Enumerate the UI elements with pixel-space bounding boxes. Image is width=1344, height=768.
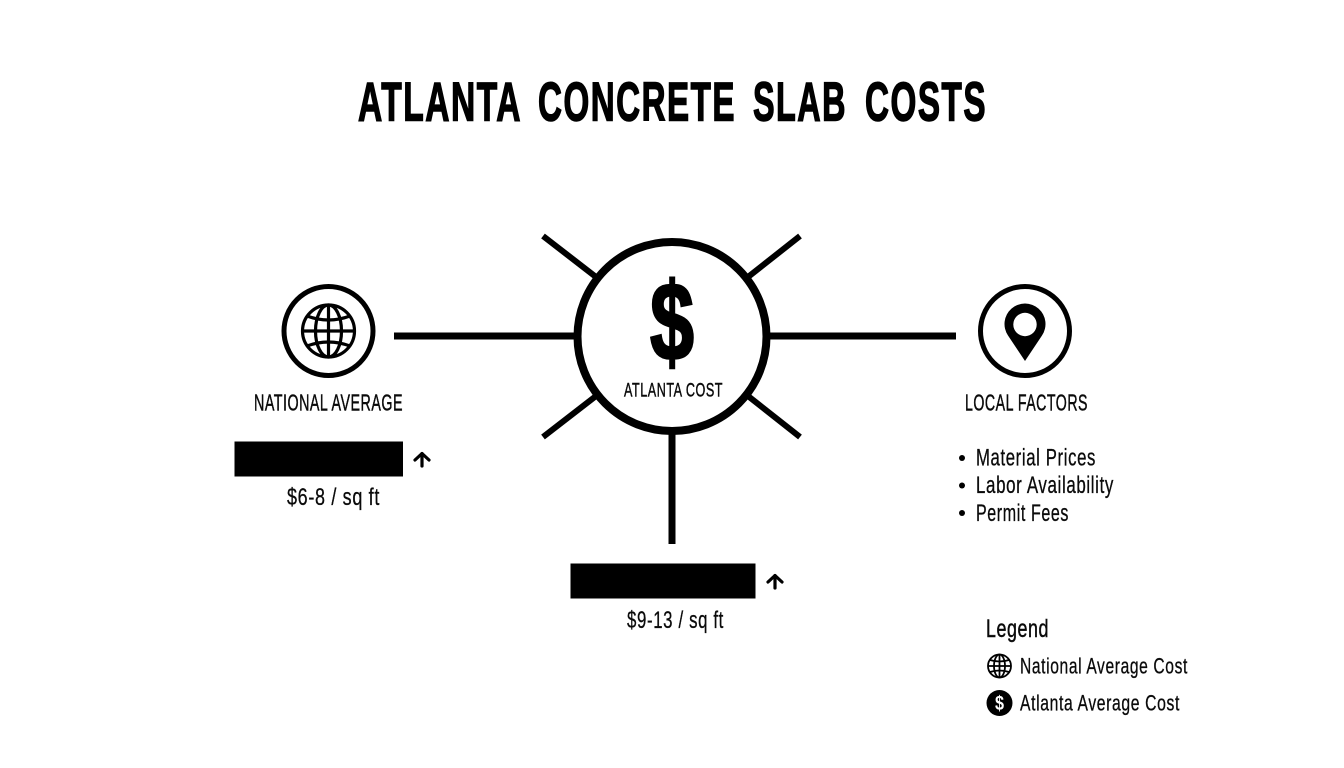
icon: legend dollar: $ <box>995 693 1004 715</box>
connector lines <box>394 236 956 544</box>
panel: local factors <box>959 286 1114 527</box>
icon: dollar sign: $ <box>650 261 694 384</box>
icon: location pin <box>980 286 1070 376</box>
heading: national average: NATIONAL AVERAGE <box>254 390 403 416</box>
legend title: Legend <box>986 615 1049 643</box>
arrow: national up <box>415 454 429 466</box>
title: CONCRETE <box>538 70 736 132</box>
icon: globe <box>284 286 373 376</box>
title <box>358 70 987 132</box>
title: COSTS <box>865 70 987 132</box>
central hub: Atlanta cost <box>578 242 766 431</box>
panel: Atlanta cost bar <box>570 564 782 634</box>
bar: Atlanta cost <box>570 564 756 598</box>
bar: national cost <box>234 442 403 476</box>
legend label: national: National Average Cost <box>1020 654 1188 678</box>
list: local factors: Labor Availability <box>976 472 1114 499</box>
list: local factors <box>959 444 1114 527</box>
legend label: Atlanta: Atlanta Average Cost <box>1020 690 1180 716</box>
value: national cost: $6-8 / sq ft <box>287 484 380 511</box>
hub label: ATLANTA COST <box>624 380 723 402</box>
icon: legend globe <box>988 654 1011 678</box>
list: local factors: Material Prices <box>976 444 1096 472</box>
value: Atlanta cost: $9-13 / sq ft <box>627 607 724 634</box>
title: SLAB <box>753 70 847 132</box>
arrow: Atlanta up <box>768 576 782 588</box>
panel: national average <box>234 286 429 511</box>
heading: local factors: LOCAL FACTORS <box>965 390 1088 416</box>
list: local factors: Permit Fees <box>976 500 1069 527</box>
title: ATLANTA <box>358 70 522 132</box>
icon: legend dollar <box>986 690 1012 716</box>
legend <box>986 615 1188 716</box>
